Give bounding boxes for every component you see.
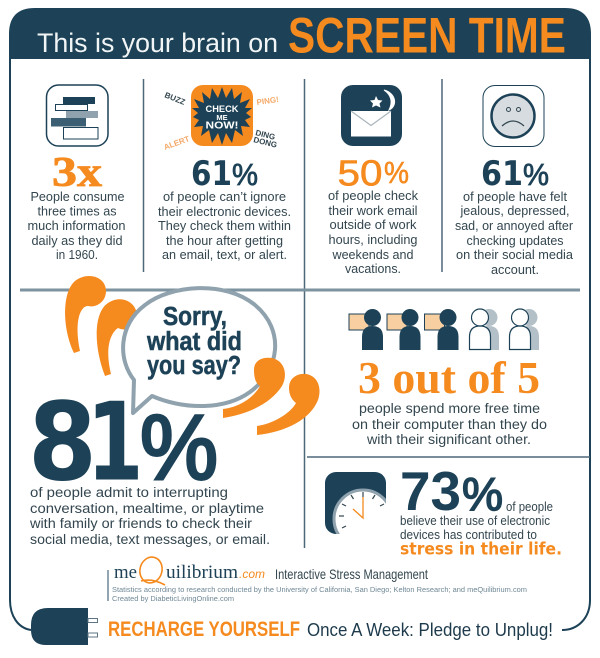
stat: 3 out of 5: 3 out of 5 [358, 352, 540, 403]
icon: orange Q [137, 555, 165, 585]
text: stress description: of people [506, 500, 553, 514]
meQuilibrium logo and credits: Interactive Stress Management [275, 566, 428, 582]
text: significant other description: people spend more free time [359, 401, 540, 416]
text: devices description: their electronic devices. [158, 205, 291, 219]
text: interrupting description: social media, text messages, or email. [30, 532, 270, 547]
callout: stress in their life: stress in their life. [400, 540, 562, 558]
icon: clock [325, 472, 386, 534]
text: social media description [455, 190, 573, 277]
icon: plug [31, 608, 98, 645]
icon: closing quotation marks [223, 358, 320, 435]
stat: 73% [400, 460, 503, 522]
stat: 81%: 8 [28, 380, 97, 506]
stat: 61% [481, 154, 549, 194]
stat: 73%: 73 [400, 460, 461, 522]
stat: 73%: % [462, 468, 503, 520]
text: 3x description: daily as they did [32, 234, 123, 248]
meQuilibrium logo and credits: uilibrium [166, 562, 238, 583]
text: email description: outside of work [330, 218, 417, 232]
stat: 61%: 61 [191, 154, 232, 194]
text: social media description: sad, or annoyed after [455, 219, 573, 233]
speech bubble: Sorry, [163, 303, 227, 331]
text: email description: their work email [328, 204, 418, 218]
text: interrupting description [29, 485, 270, 547]
icon: opening quotation marks [65, 276, 137, 376]
icon: check me now alert: CHECK [206, 104, 239, 114]
panel: 81% interrupting [28, 276, 320, 547]
stat: 50% [338, 152, 409, 194]
title banner [9, 8, 591, 63]
meQuilibrium logo and credits: me [114, 562, 137, 583]
stat: 81%: % [140, 397, 218, 499]
stat: 61%: % [232, 157, 258, 192]
text: significant other description [352, 401, 547, 447]
footer banner [31, 608, 553, 645]
text: significant other description: on their computer than they do [352, 417, 547, 432]
text: stress description: believe their use of electronic [400, 514, 550, 528]
text: pledge to unplug: Once A Week: Pledge to Unplug! [307, 620, 553, 640]
text: email description: of people check [328, 189, 419, 203]
text: 3x description: much information [28, 219, 126, 233]
icon: five people [349, 309, 539, 350]
speech bubble [123, 288, 275, 413]
labels: alert sounds: BUZZ [163, 91, 187, 107]
text: interrupting description: of people admit to interrupting [30, 485, 228, 500]
text: social media description: account. [491, 263, 539, 277]
meQuilibrium logo and credits [108, 555, 527, 603]
stat: 81% [28, 380, 218, 506]
text: devices description: the hour after getting [166, 234, 283, 248]
labels: alert sounds: PING! [256, 95, 279, 107]
stat: 50%: % [384, 155, 409, 190]
text: email description: hours, including [328, 233, 418, 247]
stat: 61%: 61 [481, 154, 523, 194]
text: social media description: checking updates [466, 234, 564, 248]
text: social media description: on their social media [456, 248, 573, 262]
title banner: This is your brain on [37, 28, 278, 58]
text: 3x description [28, 190, 126, 262]
text: email description: vacations. [345, 262, 401, 276]
text: significant other description: with their significant other. [366, 432, 531, 447]
speech bubble: you say? [147, 352, 241, 380]
panel: 3 out of 5 [349, 309, 547, 447]
text: interrupting description: with family or friends to check their [29, 516, 253, 531]
title banner: SCREEN TIME [288, 8, 566, 63]
labels: alert sounds [163, 91, 279, 152]
panel: 61% felt jealous [455, 86, 573, 277]
meQuilibrium logo and credits: Created by DiabeticLivingOnline.com [112, 596, 234, 603]
icon: check me now alert [191, 85, 253, 146]
text: interrupting description: conversation, mealtime, or playtime [30, 501, 264, 516]
text: social media description: jealous, depressed, [459, 204, 570, 218]
meQuilibrium logo and credits: Statistics according to research conducted by the University of California, San Diego; Kelton Research; and meQuilibrium.com [112, 587, 527, 594]
text: 3x description: three times as [38, 204, 116, 218]
icon: check me now alert: ME [216, 113, 228, 122]
stat: 50%: 50 [338, 152, 382, 194]
labels: alert sounds: DONG [253, 135, 278, 150]
text: devices description: an email, text, or alert. [162, 248, 287, 262]
text: devices description: of people can’t ignore [163, 190, 286, 204]
text: 3x description: People consume [30, 190, 125, 204]
icon: check me now alert: NOW! [206, 120, 238, 132]
text: social media description: of people have felt [463, 190, 568, 204]
icon: sad face [483, 86, 544, 146]
icon: stack of bars [46, 85, 108, 146]
text: email description: weekends and [331, 248, 414, 262]
icon: envelope at night [341, 85, 402, 146]
labels: alert sounds: ALERT [163, 134, 191, 152]
text: stress description [400, 500, 553, 542]
panel: 73% stress [325, 472, 560, 554]
text: 3x description: in 1960. [56, 248, 98, 262]
heading: recharge yourself: RECHARGE YOURSELF [108, 618, 300, 641]
panel: 3x information [28, 85, 126, 262]
labels: alert sounds: DING [255, 128, 276, 142]
speech bubble: what did [146, 328, 242, 356]
panel: 61% can't ignore devices [158, 85, 291, 262]
stat: 81%: 1 [86, 380, 144, 506]
stat: 61%: % [523, 157, 549, 192]
text: devices description [158, 190, 291, 262]
text: devices description: They check them within [158, 219, 291, 233]
stat: 3x: 3x [52, 150, 102, 196]
text: email description [328, 189, 419, 276]
meQuilibrium logo and credits: .com [239, 567, 265, 581]
text: stress description: devices has contributed to [400, 528, 537, 542]
panel: 50% check work email [328, 85, 419, 276]
